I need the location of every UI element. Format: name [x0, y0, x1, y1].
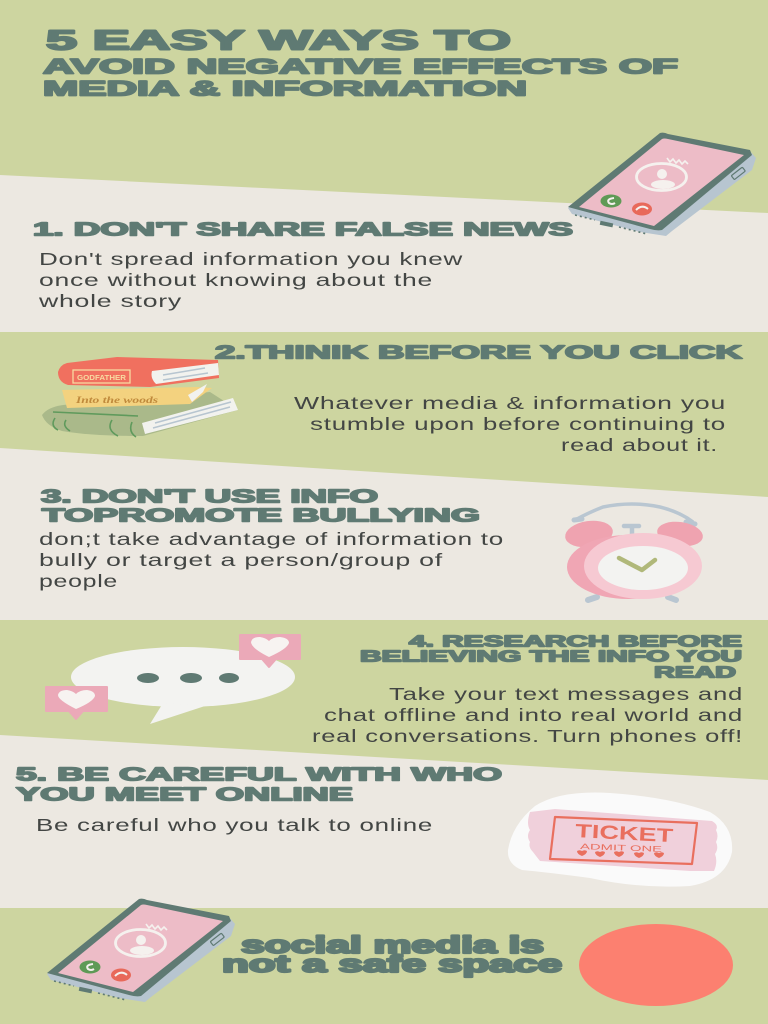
closing message: not a safe space — [222, 951, 562, 978]
heading: section 5 — [16, 764, 502, 804]
closing message — [222, 932, 562, 978]
heading: section 1: 1. DON'T SHARE FALSE NEWS — [33, 218, 573, 240]
title: AVOID NEGATIVE EFFECTS OF — [43, 56, 678, 78]
heart badge upper — [240, 635, 300, 667]
yellow book — [62, 384, 212, 408]
title: MEDIA & INFORMATION — [43, 78, 527, 100]
text: section 2 body: read about it. — [561, 435, 718, 455]
text: section 2 body: stumble upon before continuing to — [310, 414, 726, 434]
text: section 5 body: Be careful who you talk to online — [36, 815, 433, 835]
text: section 1 body: whole story — [37, 291, 182, 311]
red book: GODFATHER — [77, 375, 126, 382]
heading: section 4: READ — [654, 664, 736, 682]
coral circle — [579, 924, 733, 1006]
closing message: social media is — [241, 932, 544, 959]
icon: phone bottom — [47, 899, 235, 1002]
text: section 3 body: don;t take advantage of information to — [39, 529, 504, 549]
text: section 1 body: Don't spread information you knew — [39, 249, 463, 269]
green book — [42, 392, 238, 437]
heading: section 3 — [41, 486, 480, 526]
text: section 3 body — [39, 529, 504, 591]
heading: section 5: 5. BE CAREFUL WITH WHO — [16, 764, 502, 784]
icon: phone top — [568, 133, 756, 236]
text: section 3 body: people — [39, 571, 118, 591]
heading: section 4 — [360, 634, 742, 682]
text: section 1 body — [37, 249, 463, 311]
title — [43, 24, 678, 100]
title: 5 EASY WAYS TO — [46, 24, 511, 56]
text: section 3 body: bully or target a person/group of — [39, 550, 443, 570]
heading: section 3: 3. DON'T USE INFO — [41, 486, 378, 506]
text: section 4 body: real conversations. Turn phones off! — [312, 726, 743, 746]
heading: section 3: TOPROMOTE BULLYING — [42, 504, 480, 526]
text: section 2 body — [294, 393, 726, 455]
icon: stack of books — [42, 357, 238, 437]
red book — [58, 357, 219, 387]
icon: chat bubble with hearts — [46, 635, 300, 724]
yellow book: Into the woods — [74, 395, 159, 405]
heading: section 4: BELIEVING THE INFO YOU — [360, 648, 742, 666]
icon: ticket: TICKET — [575, 821, 674, 847]
icon: alarm clock — [563, 504, 704, 600]
text: section 4 body: Take your text messages and — [389, 684, 743, 704]
heading: section 4: 4. RESEARCH BEFORE — [409, 634, 742, 650]
text: section 2 body: Whatever media & information you — [294, 393, 726, 413]
heart badge lower — [46, 687, 107, 719]
text: section 4 body: chat offline and into real world and — [324, 705, 743, 725]
text: section 4 body — [312, 684, 743, 746]
heading: section 2: 2.THINIK BEFORE YOU CLICK — [215, 342, 743, 362]
heading: section 5: YOU MEET ONLINE — [16, 784, 353, 804]
icon: ticket: ADMIT ONE — [580, 842, 662, 854]
text: section 1 body: once without knowing about the — [39, 270, 433, 290]
icon: ticket — [508, 793, 732, 887]
